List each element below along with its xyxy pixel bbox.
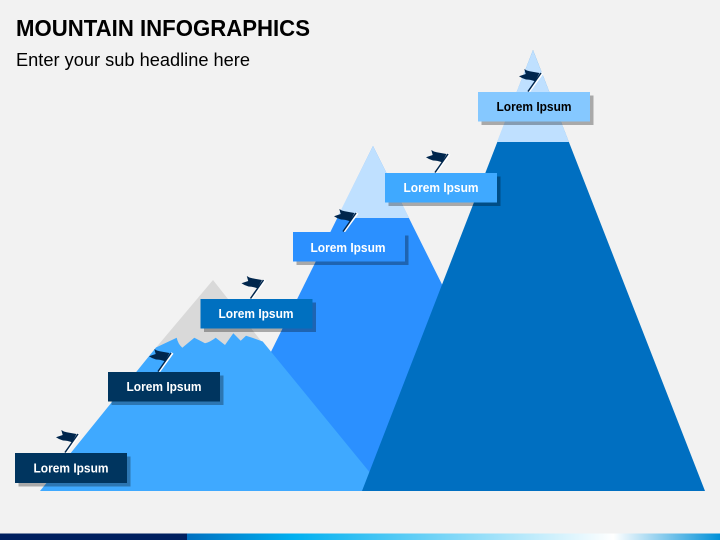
flag 3	[242, 276, 265, 298]
flag 2	[149, 349, 172, 372]
flag 4	[334, 209, 358, 232]
mountain: light blue with gray peak	[40, 280, 385, 491]
flag 5	[426, 150, 450, 172]
label 5: Lorem Ipsum	[404, 181, 478, 195]
step 4: flag and label	[293, 209, 408, 265]
label 4: Lorem Ipsum	[310, 241, 386, 255]
step 6: flag and label	[478, 69, 594, 125]
label 2: Lorem Ipsum	[126, 380, 202, 394]
step 2: flag and label	[108, 349, 224, 405]
flag 6	[519, 69, 542, 92]
subtitle: Enter your sub headline here	[16, 50, 250, 70]
step 3: flag and label	[200, 276, 316, 332]
mountain: medium blue with pale peak	[202, 146, 545, 491]
label 1: Lorem Ipsum	[34, 462, 108, 476]
mountain: dark blue with pale peak	[362, 50, 705, 491]
label 6: Lorem Ipsum	[496, 100, 572, 114]
label 3: Lorem Ipsum	[218, 307, 294, 321]
step 5: flag and label	[385, 150, 500, 206]
title: MOUNTAIN INFOGRAPHICS	[16, 15, 310, 41]
footer bar	[0, 534, 720, 540]
step 1: flag and label	[15, 430, 130, 486]
flag 1	[56, 430, 80, 452]
